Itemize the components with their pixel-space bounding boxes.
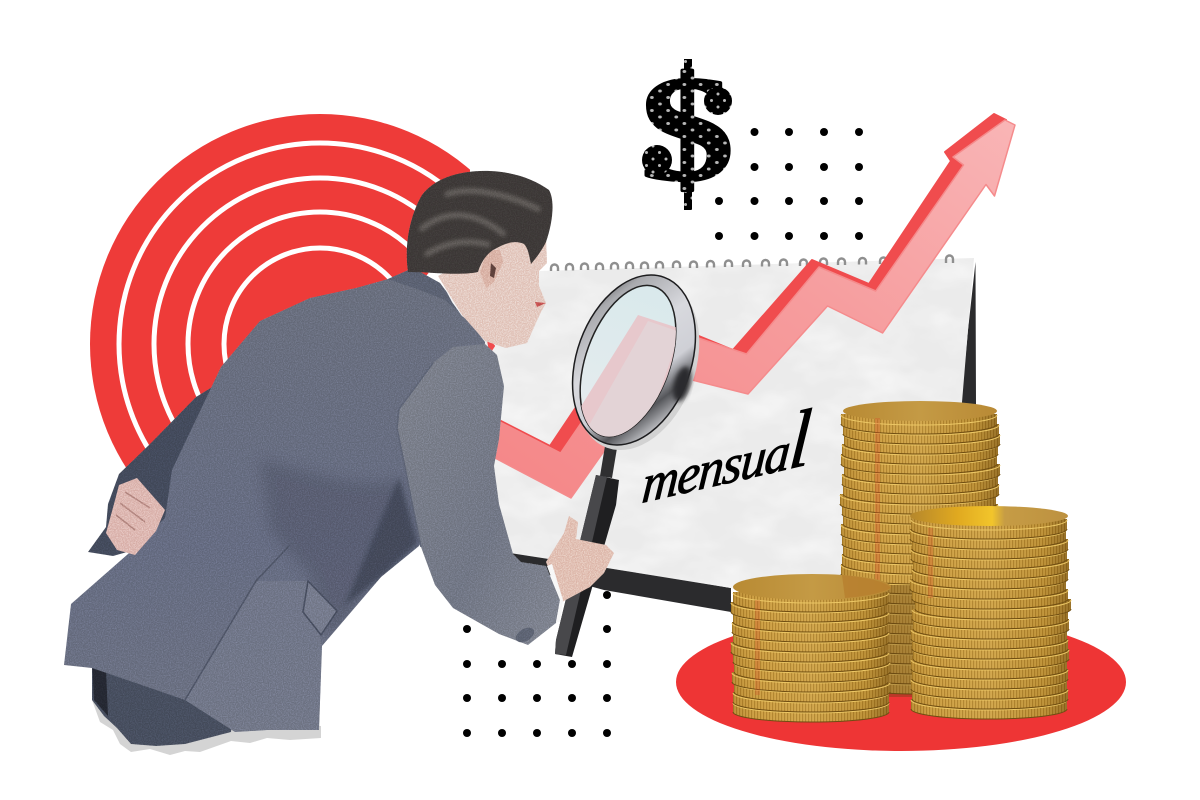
arrow red upper edge [488,114,1006,460]
growth arrow [488,114,1015,498]
dot grid: bottom [463,591,611,737]
desk calendar [470,256,976,612]
coin stacks on red base [676,401,1126,751]
magnifier handle [555,440,619,657]
magnifier rim [550,258,718,462]
front hand holding handle [546,516,614,602]
jacket body [64,268,485,732]
face and neck [438,238,547,348]
calendar paper page [470,258,974,600]
magnifying glass [555,274,700,657]
coin stack: right [910,506,1071,719]
rim dark reflection [670,365,694,403]
jacket vent seam [185,545,290,700]
calendar black stand [495,262,976,612]
rear hand [106,478,165,555]
magnifier lens [579,284,677,438]
pocket flap [303,581,337,635]
coin stack: back [840,401,1000,697]
calendar spiral rings [551,256,953,271]
lips [535,302,546,307]
arrow light face [495,120,1015,498]
dollar sign: $ [640,46,734,212]
hair [407,171,553,274]
ear [480,250,503,288]
magnifier shadow [552,262,722,468]
jacket shading [185,460,420,732]
dot grid: top right [715,128,863,240]
handwritten word: mensual [639,393,815,521]
sleeve front arm [397,344,560,645]
white shirt collar [438,275,470,322]
infographic: man inspecting monthly growth [64,59,1126,755]
shirt cuff [547,564,563,622]
businessman [64,171,614,755]
sleeve button [513,625,537,645]
red ellipse base [676,613,1126,751]
rear arm sleeve [88,370,250,556]
trousers [92,660,235,746]
red concentric circles [90,114,470,468]
collar [388,268,460,313]
coin stack: front [731,574,891,722]
torn paper edge [92,700,321,755]
